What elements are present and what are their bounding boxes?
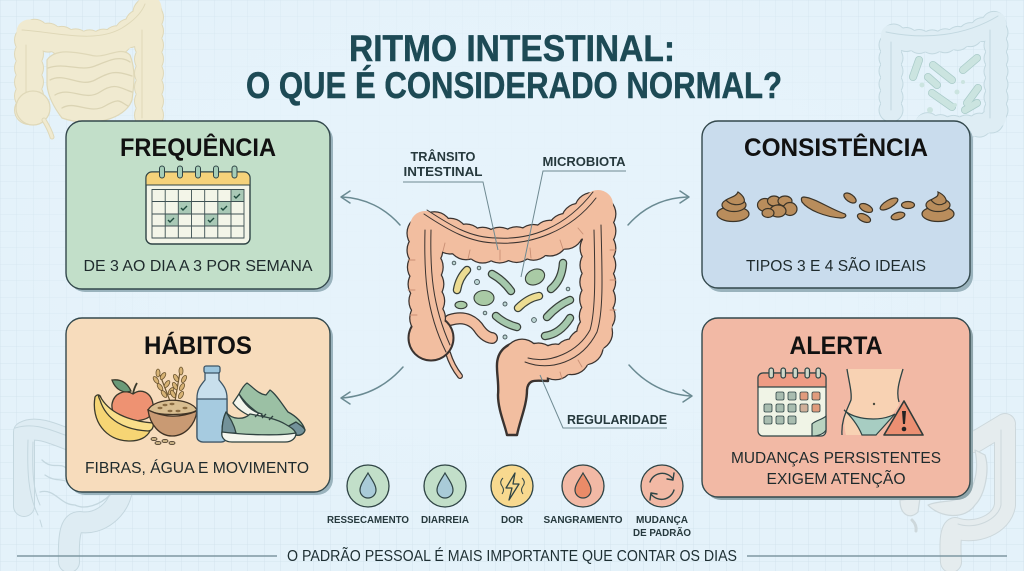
title: RITMO INTESTINAL: — [349, 28, 675, 69]
ileum — [450, 318, 492, 338]
arrow to alerta — [629, 365, 692, 402]
label: microbiota — [521, 154, 626, 277]
background intestine: top left — [16, 4, 149, 137]
appendix — [448, 353, 460, 376]
background intestine: top right — [886, 16, 998, 127]
bottom message: O PADRÃO PESSOAL É MAIS IMPORTANTE QUE CONTAR OS DIAS — [287, 548, 737, 565]
symptom: mudança de padrão: MUDANÇA — [636, 514, 688, 526]
icon: sneakers — [222, 383, 305, 442]
label: trânsito intestinal: TRÂNSITO — [410, 149, 476, 164]
icon: banana — [94, 395, 153, 441]
heading: frequência: FREQUÊNCIA — [120, 132, 276, 162]
heading: alerta: ALERTA — [790, 332, 882, 360]
icon: calendar with checks — [146, 166, 250, 244]
icon: warning triangle — [884, 401, 923, 435]
symptom: sangramento: SANGRAMENTO — [544, 514, 622, 526]
icon: calendar with squares — [758, 368, 826, 436]
label: regularidade: REGULARIDADE — [567, 412, 667, 427]
text: frequência: DE 3 AO DIA A 3 POR SEMANA — [84, 258, 313, 275]
large intestine — [408, 192, 616, 435]
icon: abdomen — [842, 369, 903, 435]
arrow to hábitos — [341, 367, 403, 404]
panel: frequência — [66, 121, 333, 292]
symptom: mudança de padrão: DE PADRÃO — [633, 526, 691, 539]
gut bacteria — [452, 261, 570, 339]
panel: consistência — [702, 121, 973, 292]
central colon illustration — [408, 192, 616, 435]
symptom: dor: DOR — [501, 514, 523, 526]
icon: water bottle — [197, 366, 227, 442]
symptom: sangramento — [544, 465, 622, 526]
symptom: diarreia: DIARREIA — [421, 514, 469, 526]
arrow to consistência — [628, 191, 689, 225]
heading: hábitos: HÁBITOS — [144, 331, 252, 360]
panel: alerta — [702, 318, 973, 500]
symptom: dor — [491, 465, 533, 526]
text: hábitos: FIBRAS, ÁGUA E MOVIMENTO — [85, 458, 309, 477]
label: trânsito intestinal — [403, 149, 498, 250]
symptom: diarreia — [421, 465, 469, 526]
background intestine: bottom left — [15, 426, 122, 562]
background intestine: bottom right — [900, 424, 1005, 562]
symptom: ressecamento: RESSECAMENTO — [327, 514, 409, 526]
label: microbiota: MICROBIOTA — [542, 154, 626, 169]
text: consistência: TIPOS 3 E 4 SÃO IDEAIS — [746, 255, 926, 275]
title — [246, 28, 782, 106]
heading: consistência: CONSISTÊNCIA — [744, 132, 928, 162]
text: alerta: EXIGEM ATENÇÃO — [766, 468, 906, 488]
icon: stool types — [717, 191, 954, 224]
arrow to frequência — [341, 191, 400, 225]
label: regularidade — [540, 375, 667, 428]
icon: grain stalks — [152, 367, 188, 401]
icon: bowl of oats — [148, 400, 197, 445]
symptom: mudança de padrão — [633, 465, 691, 539]
symptom: ressecamento — [327, 465, 409, 526]
icon: apple — [112, 380, 153, 421]
title: O QUE É CONSIDERADO NORMAL? — [246, 65, 782, 106]
label: trânsito intestinal: INTESTINAL — [404, 164, 483, 179]
text: alerta: MUDANÇAS PERSISTENTES — [731, 450, 941, 467]
text: alerta — [731, 450, 941, 488]
panel: hábitos — [66, 318, 333, 495]
